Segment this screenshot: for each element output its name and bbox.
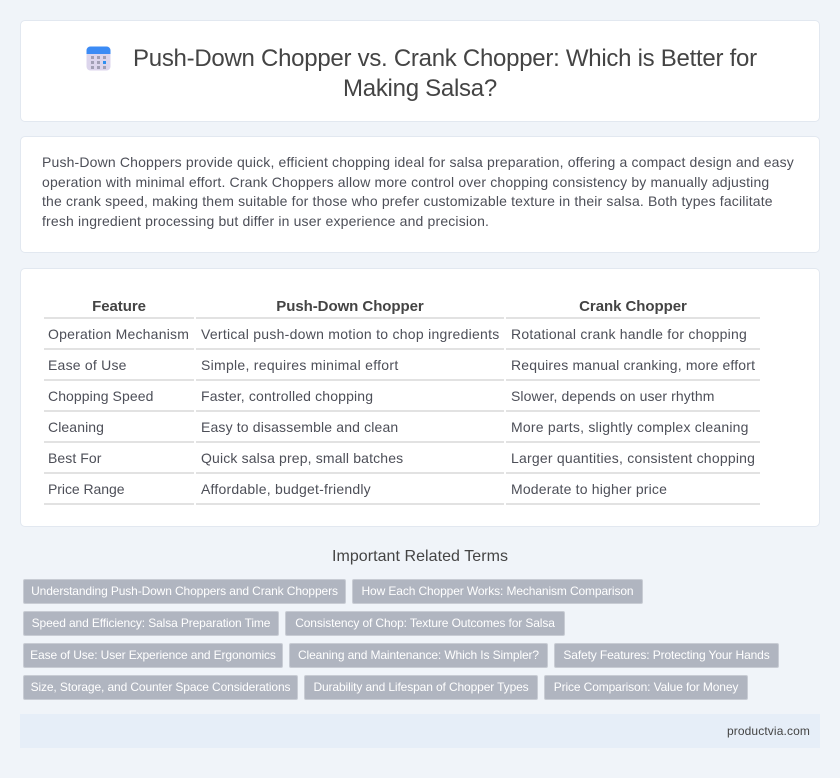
tag (23, 579, 346, 604)
tag (289, 643, 548, 668)
row: best for: Quick salsa prep, small batches (201, 450, 403, 466)
row: price range (44, 481, 760, 505)
table header: Crank Chopper (579, 298, 687, 315)
footer source text: productvia.com (727, 724, 810, 738)
row: chopping speed (44, 388, 760, 412)
summary text: Push-Down Choppers provide quick, efficient chopping ideal for salsa preparation, offering a compact design and easy (42, 154, 794, 170)
row: chopping speed: Slower, depends on user rhythm (511, 388, 714, 404)
tag: Price Comparison: Value for Money (554, 680, 738, 694)
summary text (42, 154, 794, 229)
row: chopping speed: Chopping Speed (48, 388, 153, 404)
tag (285, 611, 565, 636)
row: operation mechanism: Rotational crank handle for chopping (511, 326, 747, 342)
summary text: operation with minimal effort. Crank Choppers allow more control over chopping consistency by manually adjusting (42, 174, 769, 190)
table header (44, 298, 760, 319)
related terms tags (23, 579, 779, 700)
row: cleaning: Easy to disassemble and clean (201, 419, 398, 435)
summary text: the crank speed, making them suitable for those who prefer customizable texture in their salsa. Both types facilitate (42, 193, 773, 209)
icon: calendar grid (86, 46, 110, 70)
footer bar (20, 714, 820, 748)
summary text: fresh ingredient processing but differ in user experience and precision. (42, 213, 489, 229)
tag: Ease of Use: User Experience and Ergonomics (30, 648, 276, 662)
tag (304, 675, 538, 700)
tag: How Each Chopper Works: Mechanism Comparison (362, 584, 633, 598)
header panel (20, 20, 820, 122)
row: best for: Larger quantities, consistent chopping (511, 450, 755, 466)
row: ease of use: Requires manual cranking, more effort (511, 357, 755, 373)
tag: Understanding Push-Down Choppers and Crank Choppers (31, 584, 338, 598)
row: ease of use: Ease of Use (48, 357, 127, 373)
row: best for (44, 450, 760, 474)
title: Making Salsa? (343, 75, 497, 102)
row: operation mechanism (44, 326, 760, 350)
row: cleaning (44, 419, 760, 443)
row: ease of use (44, 357, 760, 381)
tag: Consistency of Chop: Texture Outcomes for Salsa (295, 616, 555, 630)
tag (554, 643, 779, 668)
tag (352, 579, 643, 604)
row: chopping speed: Faster, controlled chopping (201, 388, 373, 404)
title (133, 45, 757, 102)
tag (544, 675, 748, 700)
tag: Cleaning and Maintenance: Which Is Simpler? (298, 648, 539, 662)
row: price range: Price Range (48, 481, 124, 497)
table header: Feature (92, 298, 146, 315)
summary panel (20, 136, 820, 253)
title: Push-Down Chopper vs. Crank Chopper: Which is Better for (133, 45, 757, 72)
row: ease of use: Simple, requires minimal effort (201, 357, 398, 373)
tag: Durability and Lifespan of Chopper Types (313, 680, 529, 694)
row: cleaning: More parts, slightly complex cleaning (511, 419, 749, 435)
table header: Push-Down Chopper (276, 298, 424, 315)
row: operation mechanism: Vertical push-down motion to chop ingredients (201, 326, 500, 342)
tag: Safety Features: Protecting Your Hands (563, 648, 770, 662)
row: best for: Best For (48, 450, 102, 466)
tag (23, 675, 298, 700)
tag (23, 611, 279, 636)
row: price range: Affordable, budget-friendly (201, 481, 371, 497)
tag (23, 643, 283, 668)
related terms heading: Important Related Terms (332, 548, 508, 565)
row: cleaning: Cleaning (48, 419, 104, 435)
row: price range: Moderate to higher price (511, 481, 667, 497)
comparison table panel (20, 268, 820, 527)
tag: Size, Storage, and Counter Space Considerations (31, 680, 290, 694)
tag: Speed and Efficiency: Salsa Preparation Time (32, 616, 270, 630)
row: operation mechanism: Operation Mechanism (48, 326, 189, 342)
